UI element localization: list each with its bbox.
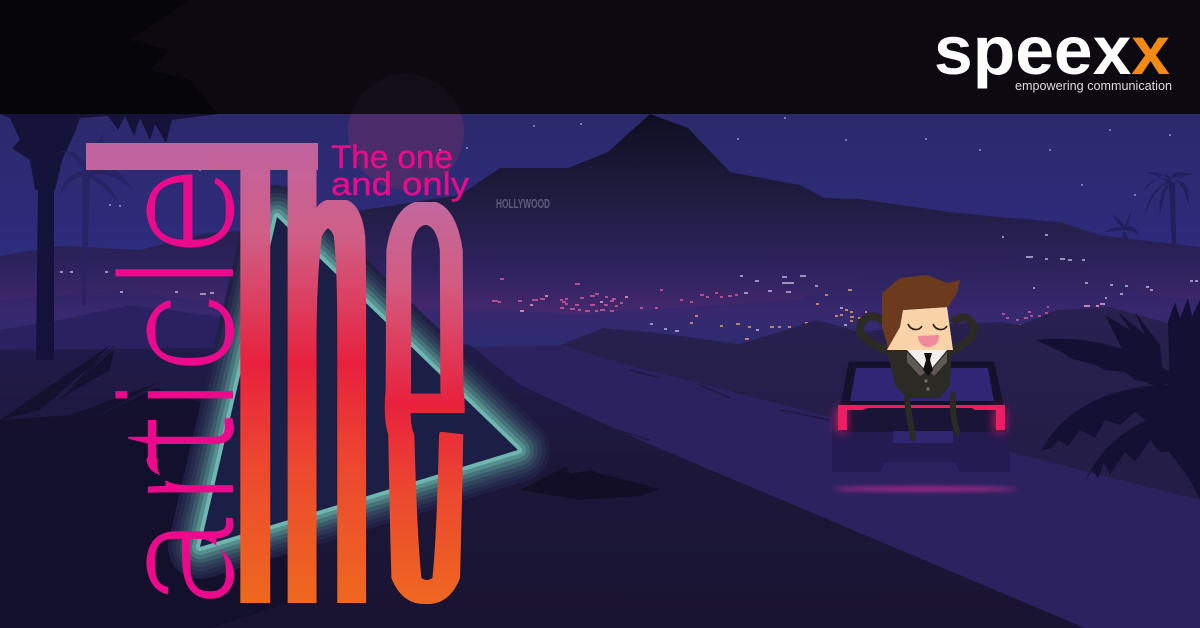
character: jacket [887, 350, 952, 398]
palm fronds over top bar [0, 0, 218, 114]
character: mouth [918, 335, 939, 347]
tagline: The one and only: and only [331, 166, 469, 202]
character: tie [923, 353, 933, 376]
big right palm [1035, 298, 1200, 500]
vertical word: article: article [85, 163, 269, 610]
tagline: The one and only: The one [331, 139, 453, 175]
character: lapels [907, 352, 947, 376]
character: eyes [908, 324, 947, 330]
neon triangle [200, 217, 518, 547]
stars [92, 118, 1170, 206]
city lights: white [60, 235, 1198, 331]
left foreground shadow [0, 345, 300, 628]
big left palm [0, 114, 218, 360]
character: face [887, 307, 953, 350]
logo wordmark: speexx [934, 12, 1170, 89]
tagline: The one and only [331, 139, 469, 202]
character: shirt [907, 350, 947, 373]
car: lower body [832, 410, 1010, 472]
hollywood sign: HOLLYWOOD [496, 197, 550, 211]
character: legs [907, 395, 957, 438]
small palm: right [1144, 172, 1195, 248]
third hill layer [553, 307, 1200, 628]
logo [934, 12, 1172, 93]
small palm: middle right [1105, 212, 1140, 280]
ground: roadside [463, 345, 1200, 628]
car: licence plate [893, 431, 953, 443]
businessman character [860, 275, 974, 438]
moon [348, 74, 464, 190]
left hill layer [0, 305, 470, 440]
character: ear [893, 319, 901, 327]
city lights: orange [690, 290, 871, 339]
car: rear window [850, 368, 994, 401]
car: taillights [838, 405, 1005, 430]
character: buttons [924, 379, 930, 391]
car: taillight glow [836, 408, 1005, 432]
roadside cracks [510, 370, 830, 440]
road [0, 345, 1085, 628]
letters T and h [240, 170, 366, 603]
T top bar extension [86, 143, 318, 170]
car: ground reflection [833, 486, 1017, 492]
big word: The [86, 143, 475, 608]
second hill layer [0, 262, 1200, 380]
character: arms [860, 317, 974, 352]
character: hair [882, 275, 960, 348]
letter e [384, 202, 465, 604]
car: trunk [840, 405, 1006, 432]
city lights: pink [492, 279, 1049, 325]
triangle ground shadow [520, 466, 660, 500]
car [832, 363, 1017, 492]
main mountain with ridge [0, 114, 1200, 350]
top bar [0, 0, 1200, 114]
car: rear window frame [842, 363, 1002, 405]
logo tagline: empowering communication [1015, 79, 1172, 93]
moon seen through top bar [348, 74, 464, 190]
far palm left [60, 132, 133, 305]
